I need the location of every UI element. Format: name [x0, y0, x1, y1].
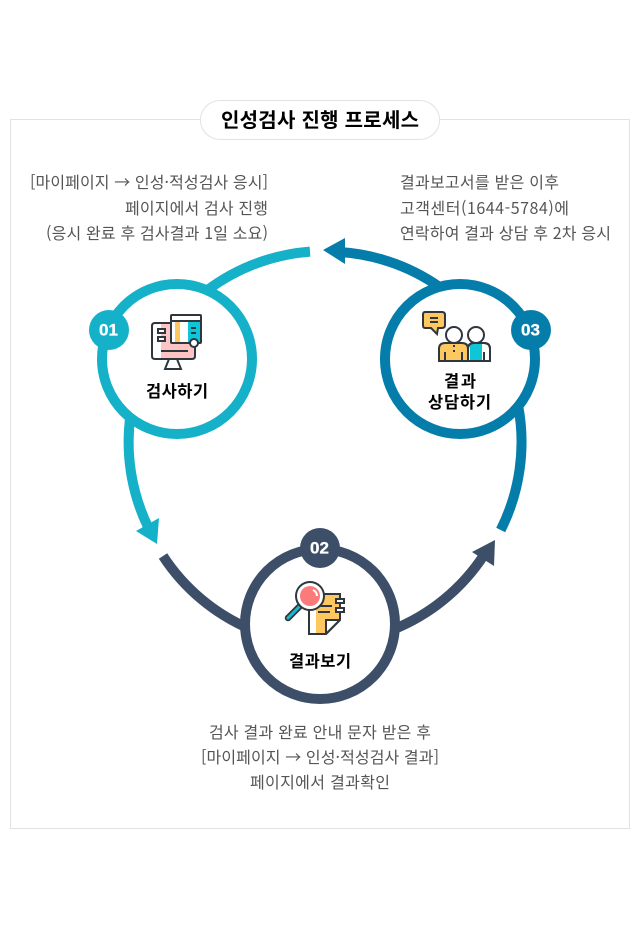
step 3 circle [385, 284, 551, 434]
title pill [200, 100, 440, 140]
step 2 badge [300, 528, 340, 568]
text block: step 1 description: [마이페이지 → 인성·적성검사 응시] [30, 169, 268, 193]
icon: magnifier on document [288, 582, 344, 634]
label: step 3 [428, 368, 491, 413]
step 2 circle [245, 528, 395, 699]
text block: step 3 description [400, 169, 611, 244]
text block: step 2 description [201, 719, 439, 793]
label: step 3: 상담하기 [428, 389, 491, 413]
step 1 badge: 01 [99, 320, 118, 340]
text block: step 1 description: (응시 완료 후 검사결과 1일 소요) [46, 220, 268, 244]
text block: step 3 description: 연락하여 결과 상담 후 2차 응시 [400, 220, 611, 244]
panel: outer frame [10, 120, 630, 828]
text block: step 2 description: 페이지에서 결과확인 [250, 769, 390, 793]
label: step 3: 결과 [444, 368, 476, 392]
arrow: step 3 to step 1 [323, 238, 522, 530]
step 3 badge: 03 [521, 320, 540, 340]
step 2 badge: 02 [310, 538, 329, 558]
label: step 1: 검사하기 [146, 378, 208, 402]
step 3 badge [511, 310, 551, 350]
arrow: step 2 to step 3 [163, 540, 495, 630]
text block: step 3 description: 고객센터(1644-5784)에 [400, 195, 569, 219]
arrow: step 1 to step 2 [129, 252, 310, 544]
label: step 2: 결과보기 [289, 648, 351, 672]
step 1 badge [89, 310, 129, 350]
text block: step 3 description: 결과보고서를 받은 이후 [400, 169, 559, 193]
text block: step 1 description: 페이지에서 검사 진행 [125, 195, 268, 219]
step 1 circle [89, 284, 252, 434]
text block: step 1 description [30, 169, 268, 244]
text block: step 2 description: [마이페이지 → 인성·적성검사 결과] [201, 744, 439, 768]
text block: step 2 description: 검사 결과 완료 안내 문자 받은 후 [209, 719, 431, 743]
icon: two people with speech bubble [423, 312, 490, 361]
icon: monitor with chart [152, 315, 201, 369]
title pill: 인성검사 진행 프로세스 [221, 104, 419, 133]
